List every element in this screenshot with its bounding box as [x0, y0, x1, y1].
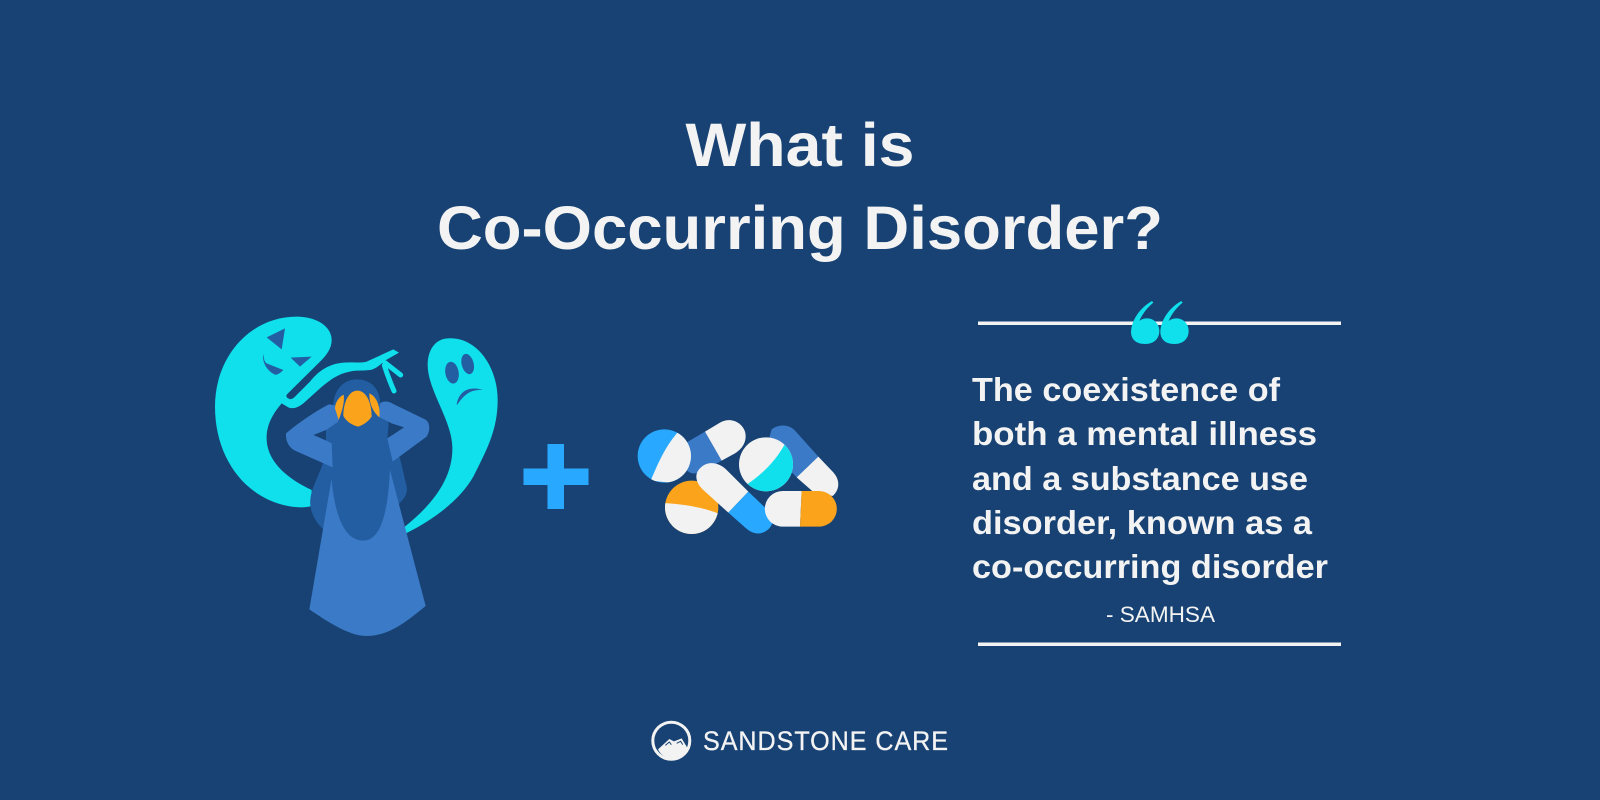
illustration: pills [638, 420, 838, 537]
capsule: right horizontal [765, 491, 837, 527]
icon: quotation mark [1131, 301, 1189, 344]
right arm [378, 402, 429, 462]
quote bottom rule [978, 642, 1341, 646]
plus sign [524, 444, 588, 509]
illustration: person with ghosts [215, 317, 498, 636]
tablet: cyan [739, 437, 793, 492]
title: Co-Occurring Disorder? [437, 194, 1163, 262]
ghost branch hand [282, 349, 401, 408]
robe [309, 457, 426, 636]
quote text: The coexistence of [972, 371, 1281, 408]
capsule: centre [696, 463, 772, 533]
left arm [286, 404, 338, 467]
title: What is [686, 111, 914, 179]
tablet: blue [638, 429, 691, 483]
quote text [972, 371, 1328, 585]
logo wordmark: SANDSTONE CARE [703, 726, 949, 756]
logo [653, 722, 949, 759]
quote attribution: - SAMHSA [1106, 602, 1215, 627]
tablet: orange [663, 481, 720, 537]
person [286, 379, 429, 636]
face and hands [335, 391, 380, 427]
capsule: top right [767, 426, 838, 496]
robe hood front [326, 417, 390, 541]
infographic canvas [215, 122, 1341, 761]
quote text: both a mental illness [972, 415, 1317, 452]
left ghost [215, 317, 332, 507]
capsule: top centre [685, 420, 746, 473]
hair back [310, 379, 407, 529]
quote top rule [978, 322, 1341, 325]
title [437, 111, 1163, 262]
right ghost [404, 338, 498, 533]
quote text: co-occurring disorder [972, 548, 1328, 585]
logo icon [653, 722, 690, 759]
quote text: disorder, known as a [972, 504, 1313, 541]
quote text: and a substance use [972, 460, 1308, 497]
